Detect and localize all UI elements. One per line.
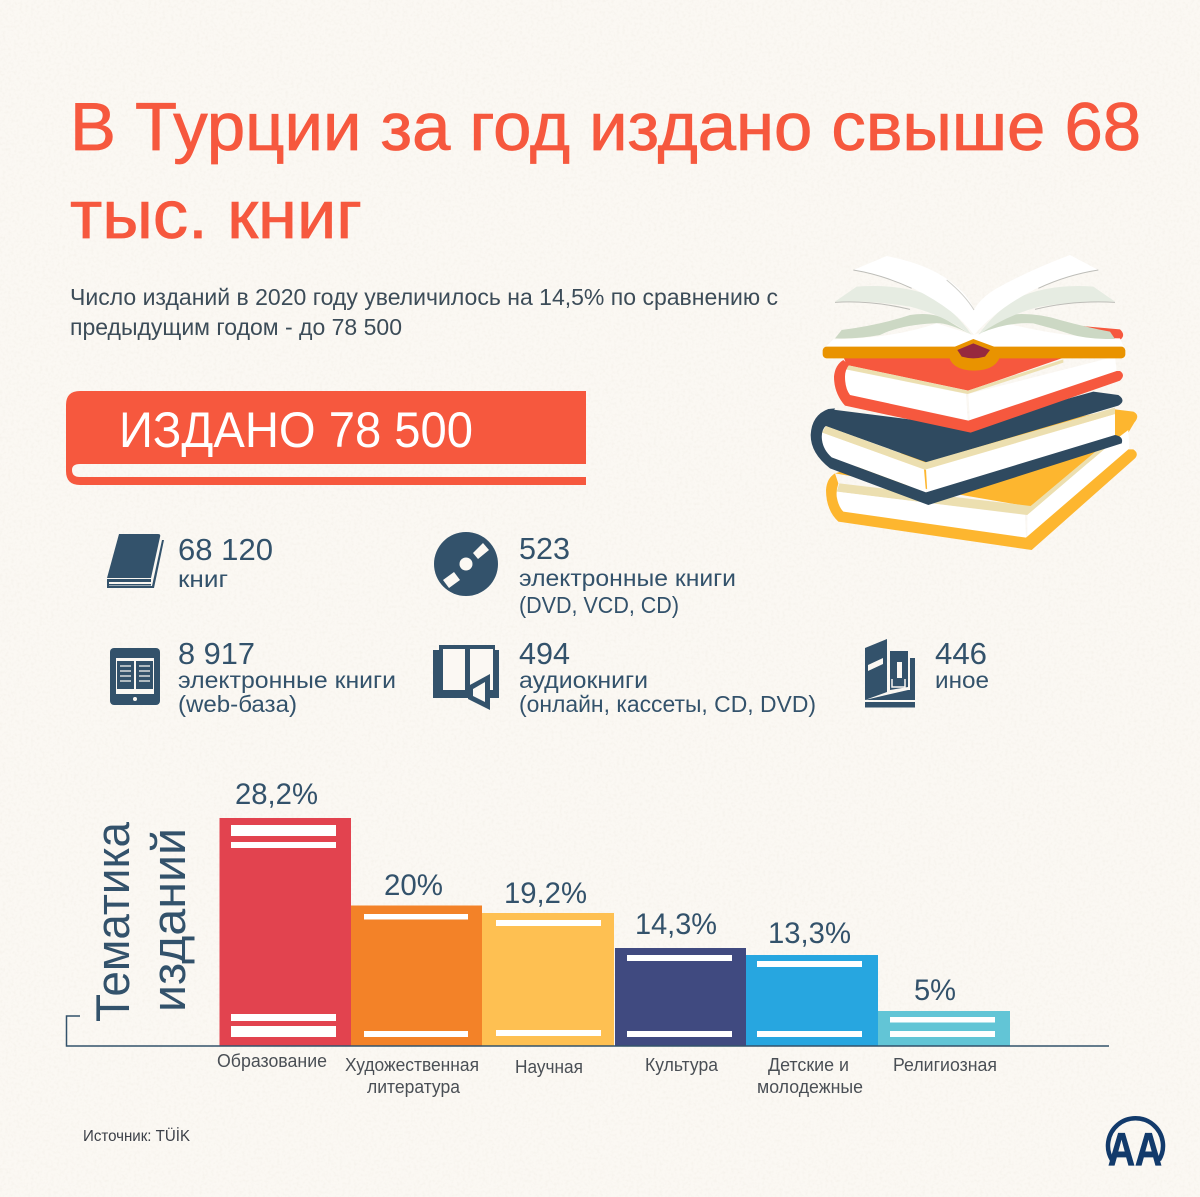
category labels: Религиозная bbox=[893, 1055, 997, 1075]
bar: religion bbox=[878, 1011, 1010, 1046]
bar values bbox=[235, 778, 956, 1007]
open book on top bbox=[823, 255, 1125, 371]
stat: audiobooks: 494 bbox=[519, 636, 570, 671]
stat: other: 446 bbox=[935, 636, 987, 671]
banner: total published bbox=[66, 391, 586, 485]
stat: disc e-books: (DVD, VCD, CD) bbox=[519, 592, 679, 618]
bar values: 20% bbox=[384, 869, 443, 902]
bar: culture bbox=[615, 948, 746, 1046]
title: тыс. книг bbox=[70, 177, 362, 253]
category labels: Культура bbox=[645, 1055, 719, 1075]
source: Источник: TÜİK bbox=[83, 1127, 191, 1145]
navy book bbox=[811, 392, 1122, 505]
stat: other bbox=[865, 636, 989, 708]
category labels: молодежные bbox=[757, 1077, 863, 1097]
heading: chart title bbox=[86, 821, 195, 1022]
bar: science bbox=[482, 913, 614, 1046]
stat: audiobooks: аудиокниги bbox=[519, 667, 648, 693]
bar: fiction bbox=[351, 906, 482, 1046]
bar chart bbox=[66, 778, 1109, 1097]
stat: disc e-books: 523 bbox=[519, 531, 570, 566]
heading: chart title: Тематика bbox=[86, 821, 139, 1022]
stat: disc e-books: электронные книги bbox=[519, 565, 736, 591]
stat: web e-books: (web-база) bbox=[178, 691, 297, 717]
stat: printed books: 68 120 bbox=[178, 532, 273, 567]
bar values: 28,2% bbox=[235, 778, 318, 811]
bar values: 13,3% bbox=[768, 917, 851, 950]
subtitle text bbox=[70, 284, 778, 340]
stat: audiobooks: (онлайн, кассеты, CD, DVD) bbox=[519, 691, 816, 717]
title: В Турции за год издано свыше 68 bbox=[70, 89, 1141, 165]
icon: books bbox=[865, 639, 915, 708]
logo: AA: AA bbox=[1108, 1123, 1162, 1175]
red book bbox=[834, 325, 1123, 433]
heading: chart title: изданий bbox=[142, 828, 195, 1012]
stat: printed books bbox=[107, 532, 273, 592]
bar values: 14,3% bbox=[635, 908, 717, 941]
stat: audiobooks bbox=[433, 636, 816, 717]
banner: total published: ИЗДАНО 78 500 bbox=[119, 402, 473, 458]
stat: web e-books: электронные книги bbox=[178, 667, 396, 693]
stat: printed books: книг bbox=[178, 566, 228, 592]
category labels: Художественная bbox=[345, 1055, 479, 1075]
category labels: литература bbox=[367, 1077, 461, 1097]
category labels: Образование bbox=[217, 1051, 327, 1071]
category labels: Детские и bbox=[768, 1055, 849, 1075]
illustration: stack of books bbox=[811, 255, 1137, 550]
bar values: 19,2% bbox=[504, 877, 587, 910]
stat: other: иное bbox=[935, 667, 989, 693]
stat: web e-books: 8 917 bbox=[178, 636, 255, 671]
stat: disc e-books bbox=[434, 531, 736, 618]
icon: book with speaker bbox=[433, 645, 499, 710]
bar: children bbox=[746, 955, 878, 1046]
bar: education bbox=[220, 818, 351, 1046]
stat: web e-books bbox=[110, 636, 396, 717]
bar values: 5% bbox=[914, 974, 956, 1007]
category labels: Научная bbox=[515, 1057, 583, 1077]
subtitle text: Число изданий в 2020 году увеличилось на 14,5% по сравнению с bbox=[70, 284, 778, 310]
yellow book bbox=[826, 409, 1137, 550]
title bbox=[70, 89, 1141, 253]
icon: tablet bbox=[110, 648, 160, 705]
category labels bbox=[217, 1051, 997, 1097]
subtitle text: предыдущим годом - до 78 500 bbox=[70, 314, 402, 340]
icon: book bbox=[107, 534, 164, 588]
icon: disc bbox=[434, 532, 498, 596]
